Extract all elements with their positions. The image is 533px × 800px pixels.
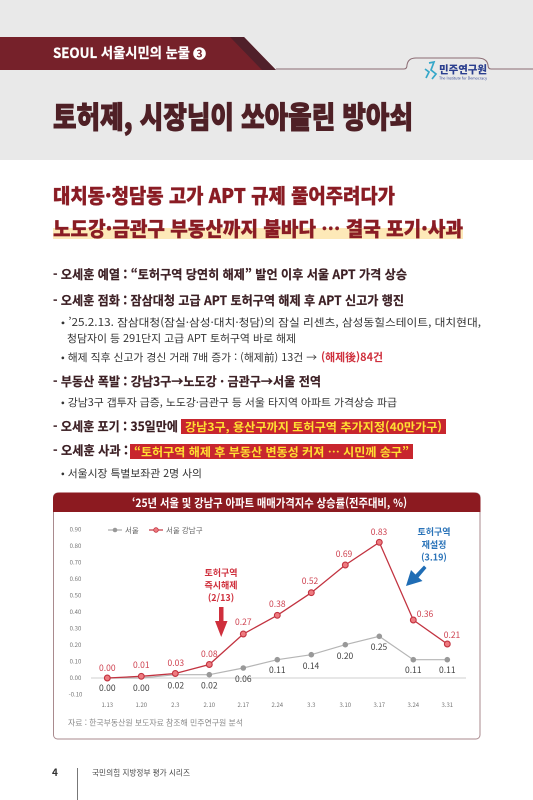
data labels: 서울 강남구: 0.27 [235,616,252,628]
highlight: 84건: (해제後)84건 [321,349,383,365]
y axis labels: 0.90 [70,524,82,534]
y axis labels: -0.10 [69,690,83,698]
sub-item: 해제 내용: • ’25.2.13. 잠삼대청(잠실·삼성·대치·청담)의 잠실 리센츠, 삼성동힐스테이트, 대치현대, [61,315,481,330]
item: 오세훈 포기: - 오세훈 포기 : 35일만에 [53,416,178,435]
sub-item: 해제 내용 둘째 줄: 청담자이 등 291단지 고급 APT 토허구역 바로 해제 [67,331,296,346]
x axis labels: 2.24 [271,700,284,709]
data labels: 서울: 0.06 [235,673,252,685]
data labels: 서울: 0.02 [168,680,184,692]
data labels: 서울 강남구: 0.36 [417,608,434,620]
arrow: blue diagonal [406,566,426,586]
x axis labels [101,700,453,709]
source note: 자료 : 한국부동산원 보도자료 참조해 민주연구원 분석 [68,716,243,728]
data labels: 서울 강남구: 0.08 [201,648,218,660]
data labels: 서울 강남구: 0.01 [133,659,150,671]
data labels: 서울: 0.11 [439,664,456,676]
sub-item: 신고가 거래: • 해제 직후 신고가 경신 거래 7배 증가 : (해제前) 13건 → [61,350,318,365]
data labels: 서울 강남구: 0.21 [444,629,461,641]
data labels: 서울 강남구: 0.00 [99,662,116,674]
data labels: 서울 강남구: 0.69 [336,548,353,560]
data labels: 서울 강남구: 0.38 [269,598,286,610]
item: 오세훈 점화: - 오세훈 점화 : 잠삼대청 고급 APT 토허구역 해제 후 APT 신고가 행진 [53,290,404,309]
data labels: 서울 강남구: 0.83 [371,526,388,538]
annotation: 토허구역 즉시해제: (2/13) [208,591,234,604]
data labels: 서울: 0.20 [337,650,354,662]
arrow: red down [215,607,228,637]
x axis labels: 1.13 [101,700,113,709]
logo tab outline [276,58,533,69]
legend: 서울 [125,525,139,536]
item: 부동산 폭발: - 부동산 폭발 : 강남3구→노도강 · 금관구→서울 전역 [53,371,321,390]
annotation: 토허구역 재설정: 토허구역 [417,525,451,538]
data labels: 서울: 0.02 [201,680,218,692]
data labels: 서울: 0.00 [99,682,116,694]
x axis labels: 2.3 [171,700,179,709]
legend [108,525,203,536]
data labels: 서울 강남구: 0.52 [302,575,319,587]
x axis labels: 3.10 [339,700,352,709]
callout: 토허구역 추가지정: 강남3구, 용산구까지 토허구역 추가지정(40만가구) [185,419,442,435]
callout: 시민께 송구: “토허구역 해제 후 부동산 변동성 커져 … 시민께 송구” [134,444,409,460]
logo: The Institute for Democracy [425,62,487,82]
y axis labels: 0.40 [70,607,82,616]
y axis labels [69,524,83,698]
y axis labels: 0.20 [70,640,82,649]
page number: 4 [52,764,58,779]
y axis labels: 0.70 [70,558,82,566]
x axis labels: 3.3 [307,700,315,709]
section banner: SEOUL 서울시민의 눈물 [53,43,190,63]
data labels: 서울 강남구: 0.03 [168,657,184,669]
y axis labels: 0.80 [70,541,82,550]
chart header: ‘25년 서울 및 강남구 아파트 매매가격지수 상승률(전주대비, %) [132,495,407,511]
annotation: 토허구역 즉시해제: 즉시해제 [204,578,238,592]
data labels: 서울: 0.00 [133,682,150,694]
x axis labels: 3.17 [373,700,386,709]
logo: The Institute for Democracy: The Institute for Democracy [439,76,487,82]
section banner: 3 [196,46,203,61]
annotation: 토허구역 재설정: (3.19) [421,550,447,564]
item: 오세훈 사과: - 오세훈 사과 : [53,440,128,459]
sub-item: 특별보좌관 사의: • 서울시장 특별보좌관 2명 사의 [61,466,202,481]
logo: The Institute for Democracy: 민주연구원 [439,62,487,77]
item: 오세훈 예열: - 오세훈 예열 : “토허구역 당연히 해제” 발언 이후 서울 APT 가격 상승 [53,264,407,283]
header background panel [0,0,533,160]
x axis labels: 3.24 [407,700,420,709]
subtitle line 2 with highlight: 노도강·금관구 부동산까지 불바다 … 결국 포기·사과 [53,213,463,242]
data labels: 서울 [99,641,456,694]
x axis labels: 3.31 [441,700,453,709]
annotation: 토허구역 재설정 [417,525,451,564]
y axis labels: 0.50 [70,590,82,600]
data labels: 서울: 0.14 [303,660,320,672]
section banner [0,37,276,70]
bullet list [53,264,481,481]
panel: chart [53,492,480,739]
x axis labels: 2.10 [203,700,216,709]
y axis labels: 0.10 [70,656,82,666]
sub-item: 갭투자: • 강남3구 갭투자 급증, 노도강·금관구 등 서울 타지역 아파트 가격상승 파급 [61,395,397,410]
x axis labels: 2.17 [237,700,250,709]
y axis labels: 0.60 [70,574,82,583]
footer text: 국민의힘 지방정부 평가 시리즈 [92,768,190,778]
data labels: 서울: 0.25 [371,641,388,653]
annotation: 토허구역 즉시해제: 토허구역 [204,566,238,579]
data labels: 서울: 0.11 [405,664,422,676]
line series: 서울 [107,634,450,678]
chart header [53,492,480,512]
x axis labels: 1.20 [135,700,148,709]
legend: 서울 강남구 [166,525,203,536]
data labels: 서울: 0.11 [269,664,286,676]
subtitle line 1: 대치동·청담동 고가 APT 규제 풀어주려다가 [53,180,395,209]
y axis labels: 0.30 [70,624,82,632]
annotation: 토허구역 즉시해제 [204,566,238,604]
title: 토허제, 시장님이 쏘아올린 방아쇠 [53,93,413,137]
y axis labels: 0.00 [70,673,82,682]
data labels: 서울 강남구 [99,526,461,674]
annotation: 토허구역 재설정: 재설정 [422,538,446,551]
line series: 서울 강남구 [104,539,450,681]
